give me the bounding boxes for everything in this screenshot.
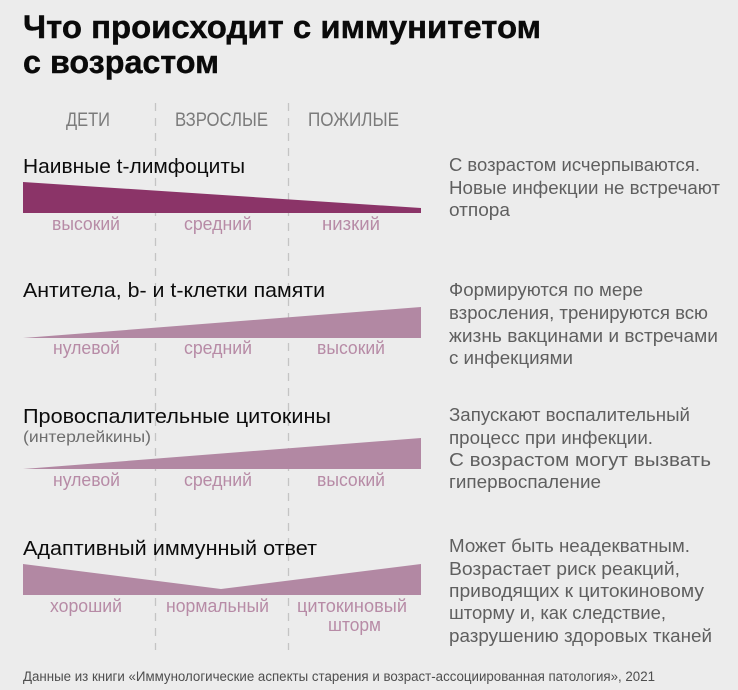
column headers bbox=[66, 110, 399, 131]
level labels: высокий bbox=[52, 214, 120, 234]
description: С возрастом могут вызвать bbox=[449, 450, 711, 470]
level labels: нормальный bbox=[166, 596, 269, 616]
level labels: средний bbox=[184, 214, 252, 234]
description bbox=[449, 536, 712, 646]
description: С возрастом исчерпываются. bbox=[449, 155, 700, 175]
panel: naive t-lymphocytes bbox=[23, 155, 720, 234]
description: гипервоспаление bbox=[449, 472, 601, 492]
chart: increasing wedge bbox=[23, 438, 421, 469]
level labels: шторм bbox=[328, 615, 381, 635]
level labels: нулевой bbox=[53, 470, 120, 490]
heading: naive t-lymphocytes: Наивные t-лимфоциты bbox=[23, 155, 245, 178]
title: Что происходит с иммунитетом bbox=[23, 9, 541, 45]
heading: adaptive immune response: Адаптивный иммунный ответ bbox=[23, 537, 318, 560]
description: процесс при инфекции. bbox=[449, 428, 653, 448]
level labels: высокий bbox=[317, 338, 385, 358]
level labels: высокий bbox=[317, 470, 385, 490]
description: разрушению здоровых тканей bbox=[449, 626, 712, 646]
level labels bbox=[53, 338, 385, 358]
description bbox=[449, 155, 720, 220]
level labels: хороший bbox=[50, 596, 122, 616]
description bbox=[449, 280, 718, 368]
description: Запускают воспалительный bbox=[449, 405, 690, 425]
level labels bbox=[53, 470, 385, 490]
description: с инфекциями bbox=[449, 348, 573, 368]
chart: decreasing wedge bbox=[23, 182, 421, 213]
level labels bbox=[52, 214, 380, 234]
description: Новые инфекции не встречают bbox=[449, 178, 720, 198]
panel: memory cells bbox=[23, 279, 718, 368]
description: взросления, тренируются всю bbox=[449, 303, 708, 323]
panel: adaptive immune response bbox=[23, 536, 712, 646]
level labels: низкий bbox=[322, 214, 380, 234]
description: приводящих к цитокиновому bbox=[449, 581, 704, 601]
description: жизнь вакцинами и встречами bbox=[449, 326, 718, 346]
level labels: средний bbox=[184, 470, 252, 490]
description: отпора bbox=[449, 200, 511, 220]
column headers: ДЕТИ bbox=[66, 110, 110, 131]
chart: V-shaped band bbox=[23, 564, 421, 595]
source note: Данные из книги «Иммунологические аспекты старения и возраст-ассоциированная патология», 2021 bbox=[23, 669, 655, 684]
description: Возрастает риск реакций, bbox=[449, 559, 680, 579]
panel: cytokines bbox=[23, 405, 711, 492]
heading: pro-inflammatory cytokines: Провоспалительные цитокины bbox=[23, 405, 331, 428]
title: с возрастом bbox=[23, 44, 219, 80]
description: Может быть неадекватным. bbox=[449, 536, 690, 556]
description: Формируются по мере bbox=[449, 280, 643, 300]
column headers: ВЗРОСЛЫЕ bbox=[175, 110, 268, 131]
chart: increasing wedge bbox=[23, 307, 421, 338]
level labels: цитокиновый bbox=[297, 596, 407, 616]
level labels bbox=[50, 596, 407, 635]
subheading: interleukins: (интерлейкины) bbox=[23, 429, 151, 446]
level labels: средний bbox=[184, 338, 252, 358]
title bbox=[23, 9, 541, 80]
description: шторму и, как следствие, bbox=[449, 603, 666, 623]
column headers: ПОЖИЛЫЕ bbox=[308, 110, 399, 131]
description bbox=[449, 405, 711, 492]
heading: antibodies and memory cells: Антитела, b- и t-клетки памяти bbox=[23, 279, 325, 302]
level labels: нулевой bbox=[53, 338, 120, 358]
